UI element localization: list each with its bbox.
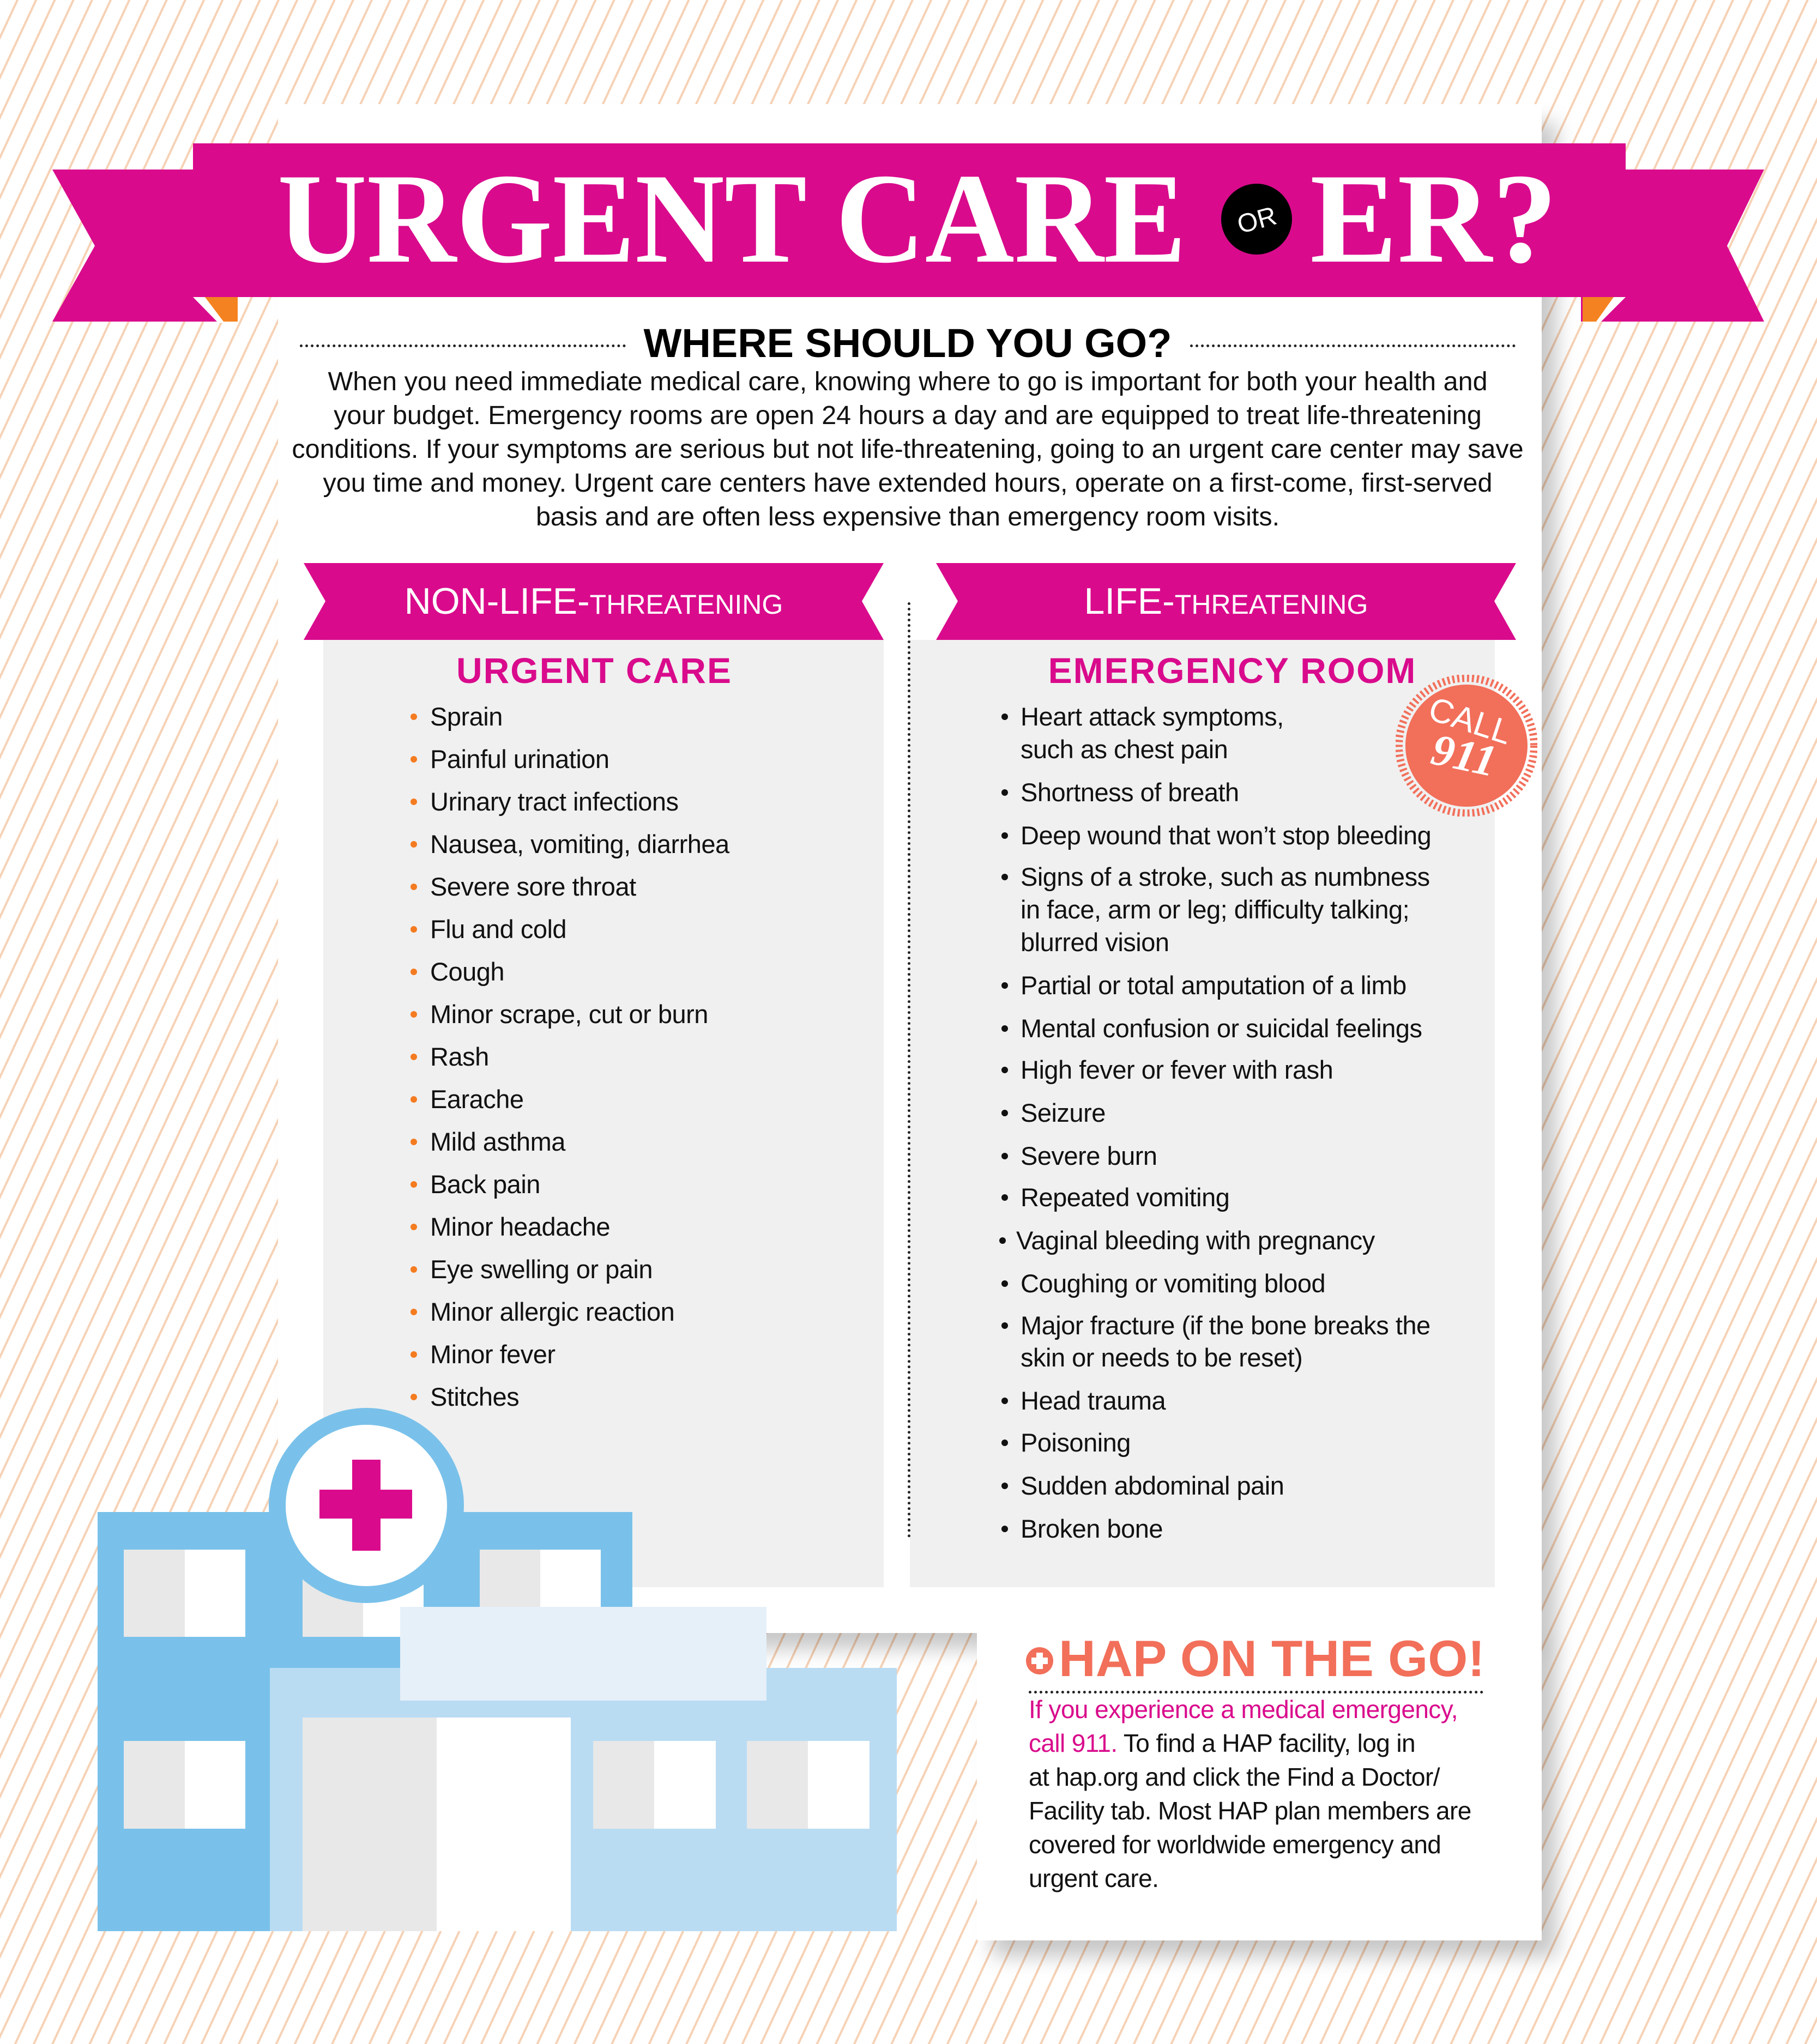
list: emergency room: Broken bone [1021, 1514, 1163, 1543]
or circle [1221, 184, 1292, 255]
list: urgent care: Rash [430, 1042, 489, 1071]
list: emergency room: Poisoning [1021, 1428, 1131, 1457]
list: urgent care: Eye swelling or pain [430, 1255, 653, 1284]
list: urgent care: Minor headache [430, 1212, 610, 1241]
list: emergency room: in face, arm or leg; difficulty talking; [1021, 895, 1409, 924]
intro paragraph: you time and money. Urgent care centers have extended hours, operate on a first-come, first-served [323, 468, 1492, 498]
subheading: where should you go: WHERE SHOULD YOU GO? [644, 320, 1172, 366]
title banner [52, 143, 1764, 323]
badge: call 911: CALL [1424, 690, 1516, 752]
list: emergency room: Seizure [1021, 1098, 1106, 1127]
panel: HAP on the go: If you experience a medical emergency, [1029, 1695, 1458, 1724]
list: urgent care: Minor fever [430, 1340, 556, 1369]
heading: urgent care: URGENT CARE [456, 650, 732, 691]
list: emergency room: Mental confusion or suicidal feelings [1021, 1014, 1422, 1043]
panel: HAP on the go: Facility tab. Most HAP plan members are [1029, 1797, 1471, 1825]
list: emergency room [999, 702, 1431, 1543]
ribbon: non-life-threatening: NON-LIFE-THREATENING [405, 580, 783, 622]
list: emergency room: blurred vision [1021, 928, 1169, 957]
intro paragraph: basis and are often less expensive than emergency room visits. [536, 502, 1279, 531]
panel: HAP on the go: HAP ON THE GO! [1059, 1630, 1485, 1687]
illustration: hospital [98, 1408, 897, 1931]
list: emergency room: Signs of a stroke, such as numbness [1021, 862, 1430, 891]
list: emergency room: Repeated vomiting [1021, 1183, 1229, 1212]
ribbon tail right [1581, 170, 1764, 323]
icon: plus circle [1026, 1647, 1053, 1674]
list: emergency room: High fever or fever with rash [1021, 1055, 1333, 1084]
badge: call 911 [1396, 675, 1537, 817]
panel: HAP on the go [1026, 1630, 1485, 1892]
title text: URGENT CARE [277, 148, 1186, 290]
list: urgent care: Urinary tract infections [430, 787, 679, 816]
list: urgent care: Minor allergic reaction [430, 1297, 674, 1326]
heading: emergency room: EMERGENCY ROOM [1048, 650, 1416, 691]
list: urgent care: Cough [430, 957, 504, 986]
banner main [193, 143, 1626, 297]
subheading: where should you go [300, 320, 1516, 366]
grey panels [323, 640, 884, 1587]
list: urgent care: Severe sore throat [430, 872, 636, 901]
list: emergency room: Vaginal bleeding with pregnancy [1016, 1226, 1375, 1255]
list: emergency room: Shortness of breath [1021, 778, 1239, 807]
list: emergency room: Partial or total amputation of a limb [1021, 971, 1406, 1000]
ribbon: non-life-threatening [304, 563, 884, 640]
list: emergency room: Major fracture (if the bone breaks the [1021, 1311, 1430, 1340]
or circle: OR [1234, 202, 1279, 239]
list: urgent care: Flu and cold [430, 915, 566, 944]
list: urgent care: Mild asthma [430, 1127, 565, 1156]
list: urgent care: Stitches [430, 1382, 519, 1411]
list: urgent care: Back pain [430, 1170, 540, 1199]
badge: call 911: 911 [1427, 724, 1501, 786]
ribbon tail left [52, 170, 238, 323]
list: urgent care: Earache [430, 1085, 524, 1114]
banner main: ER? [1310, 148, 1558, 290]
intro paragraph: your budget. Emergency rooms are open 24 hours a day and are equipped to treat life-threatening [334, 401, 1482, 430]
intro paragraph: When you need immediate medical care, knowing where to go is important for both your health and [328, 367, 1488, 396]
list: urgent care: Nausea, vomiting, diarrhea [430, 830, 729, 858]
panel: HAP on the go: covered for worldwide emergency and [1029, 1830, 1441, 1859]
icon: medical cross circle [269, 1408, 464, 1603]
ribbon: life-threatening [936, 563, 1516, 640]
panel: HAP on the go: at hap.org and click the Find a Doctor/ [1029, 1763, 1440, 1791]
list: emergency room: Severe burn [1021, 1141, 1157, 1170]
list: emergency room: such as chest pain [1021, 735, 1228, 764]
list: emergency room: Deep wound that won’t stop bleeding [1021, 821, 1431, 850]
list: urgent care: Minor scrape, cut or burn [430, 1000, 708, 1029]
list: emergency room: skin or needs to be reset) [1021, 1343, 1302, 1372]
list: emergency room: Head trauma [1021, 1386, 1166, 1415]
white card [278, 104, 1542, 1633]
list: emergency room: Coughing or vomiting blood [1021, 1269, 1325, 1298]
dotted divider [908, 602, 910, 1538]
panel: HAP on the go: urgent care. [1029, 1864, 1158, 1892]
list: emergency room: Heart attack symptoms, [1021, 702, 1284, 731]
ribbon: life-threatening: LIFE-THREATENING [1084, 580, 1368, 622]
intro paragraph [292, 367, 1524, 531]
list: urgent care: Painful urination [430, 745, 609, 773]
list: urgent care: Sprain [430, 702, 503, 731]
intro paragraph: conditions. If your symptoms are serious but not life-threatening, going to an urgent care center may save [292, 434, 1524, 464]
list: emergency room: Sudden abdominal pain [1021, 1471, 1284, 1500]
list: urgent care [411, 702, 729, 1411]
panel: HAP on the go: call 911. To find a HAP facility, log in [1029, 1729, 1415, 1757]
